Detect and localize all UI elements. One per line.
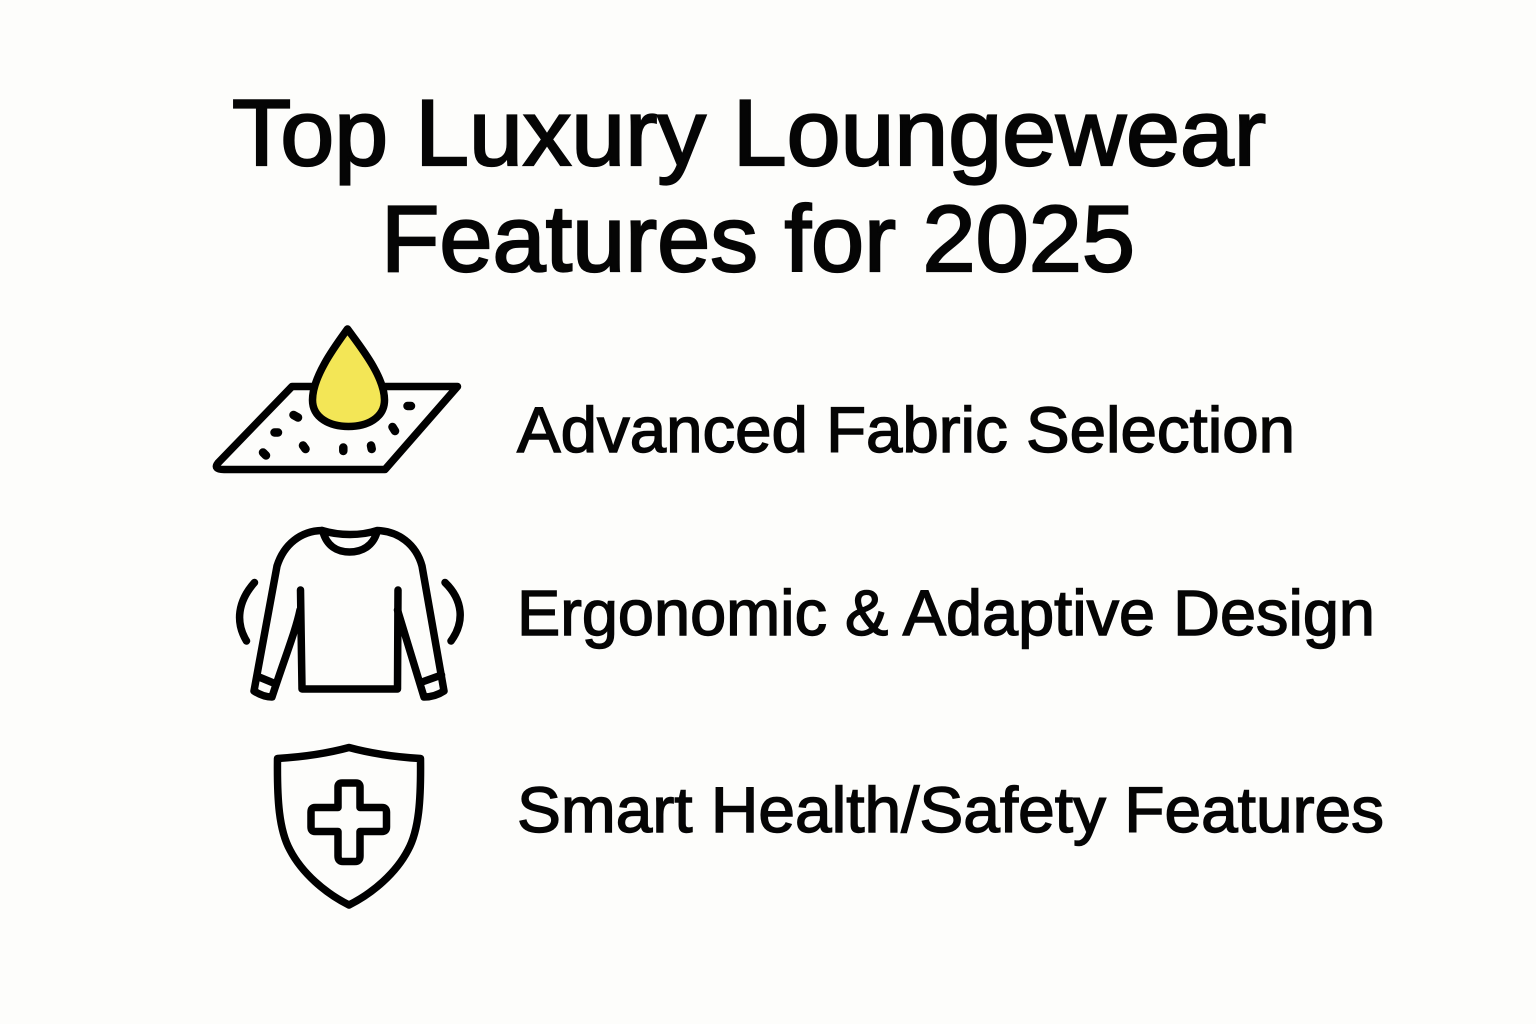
title: Features for 2025 [381,186,1135,291]
feature label: design: Ergonomic & Adaptive Design [517,577,1375,649]
title: Top Luxury Loungewear [232,80,1266,185]
icon: fabric swatch with yellow droplet [216,329,458,470]
icon: yellow droplet [312,329,384,426]
feature label: health and safety: Smart Health/Safety Features [517,774,1384,846]
feature label: fabric: Advanced Fabric Selection [517,394,1295,466]
icon: medical cross [311,783,386,862]
title [232,80,1266,291]
icon: sweater with motion arcs [240,530,460,697]
icon: shield with medical cross [277,748,421,905]
